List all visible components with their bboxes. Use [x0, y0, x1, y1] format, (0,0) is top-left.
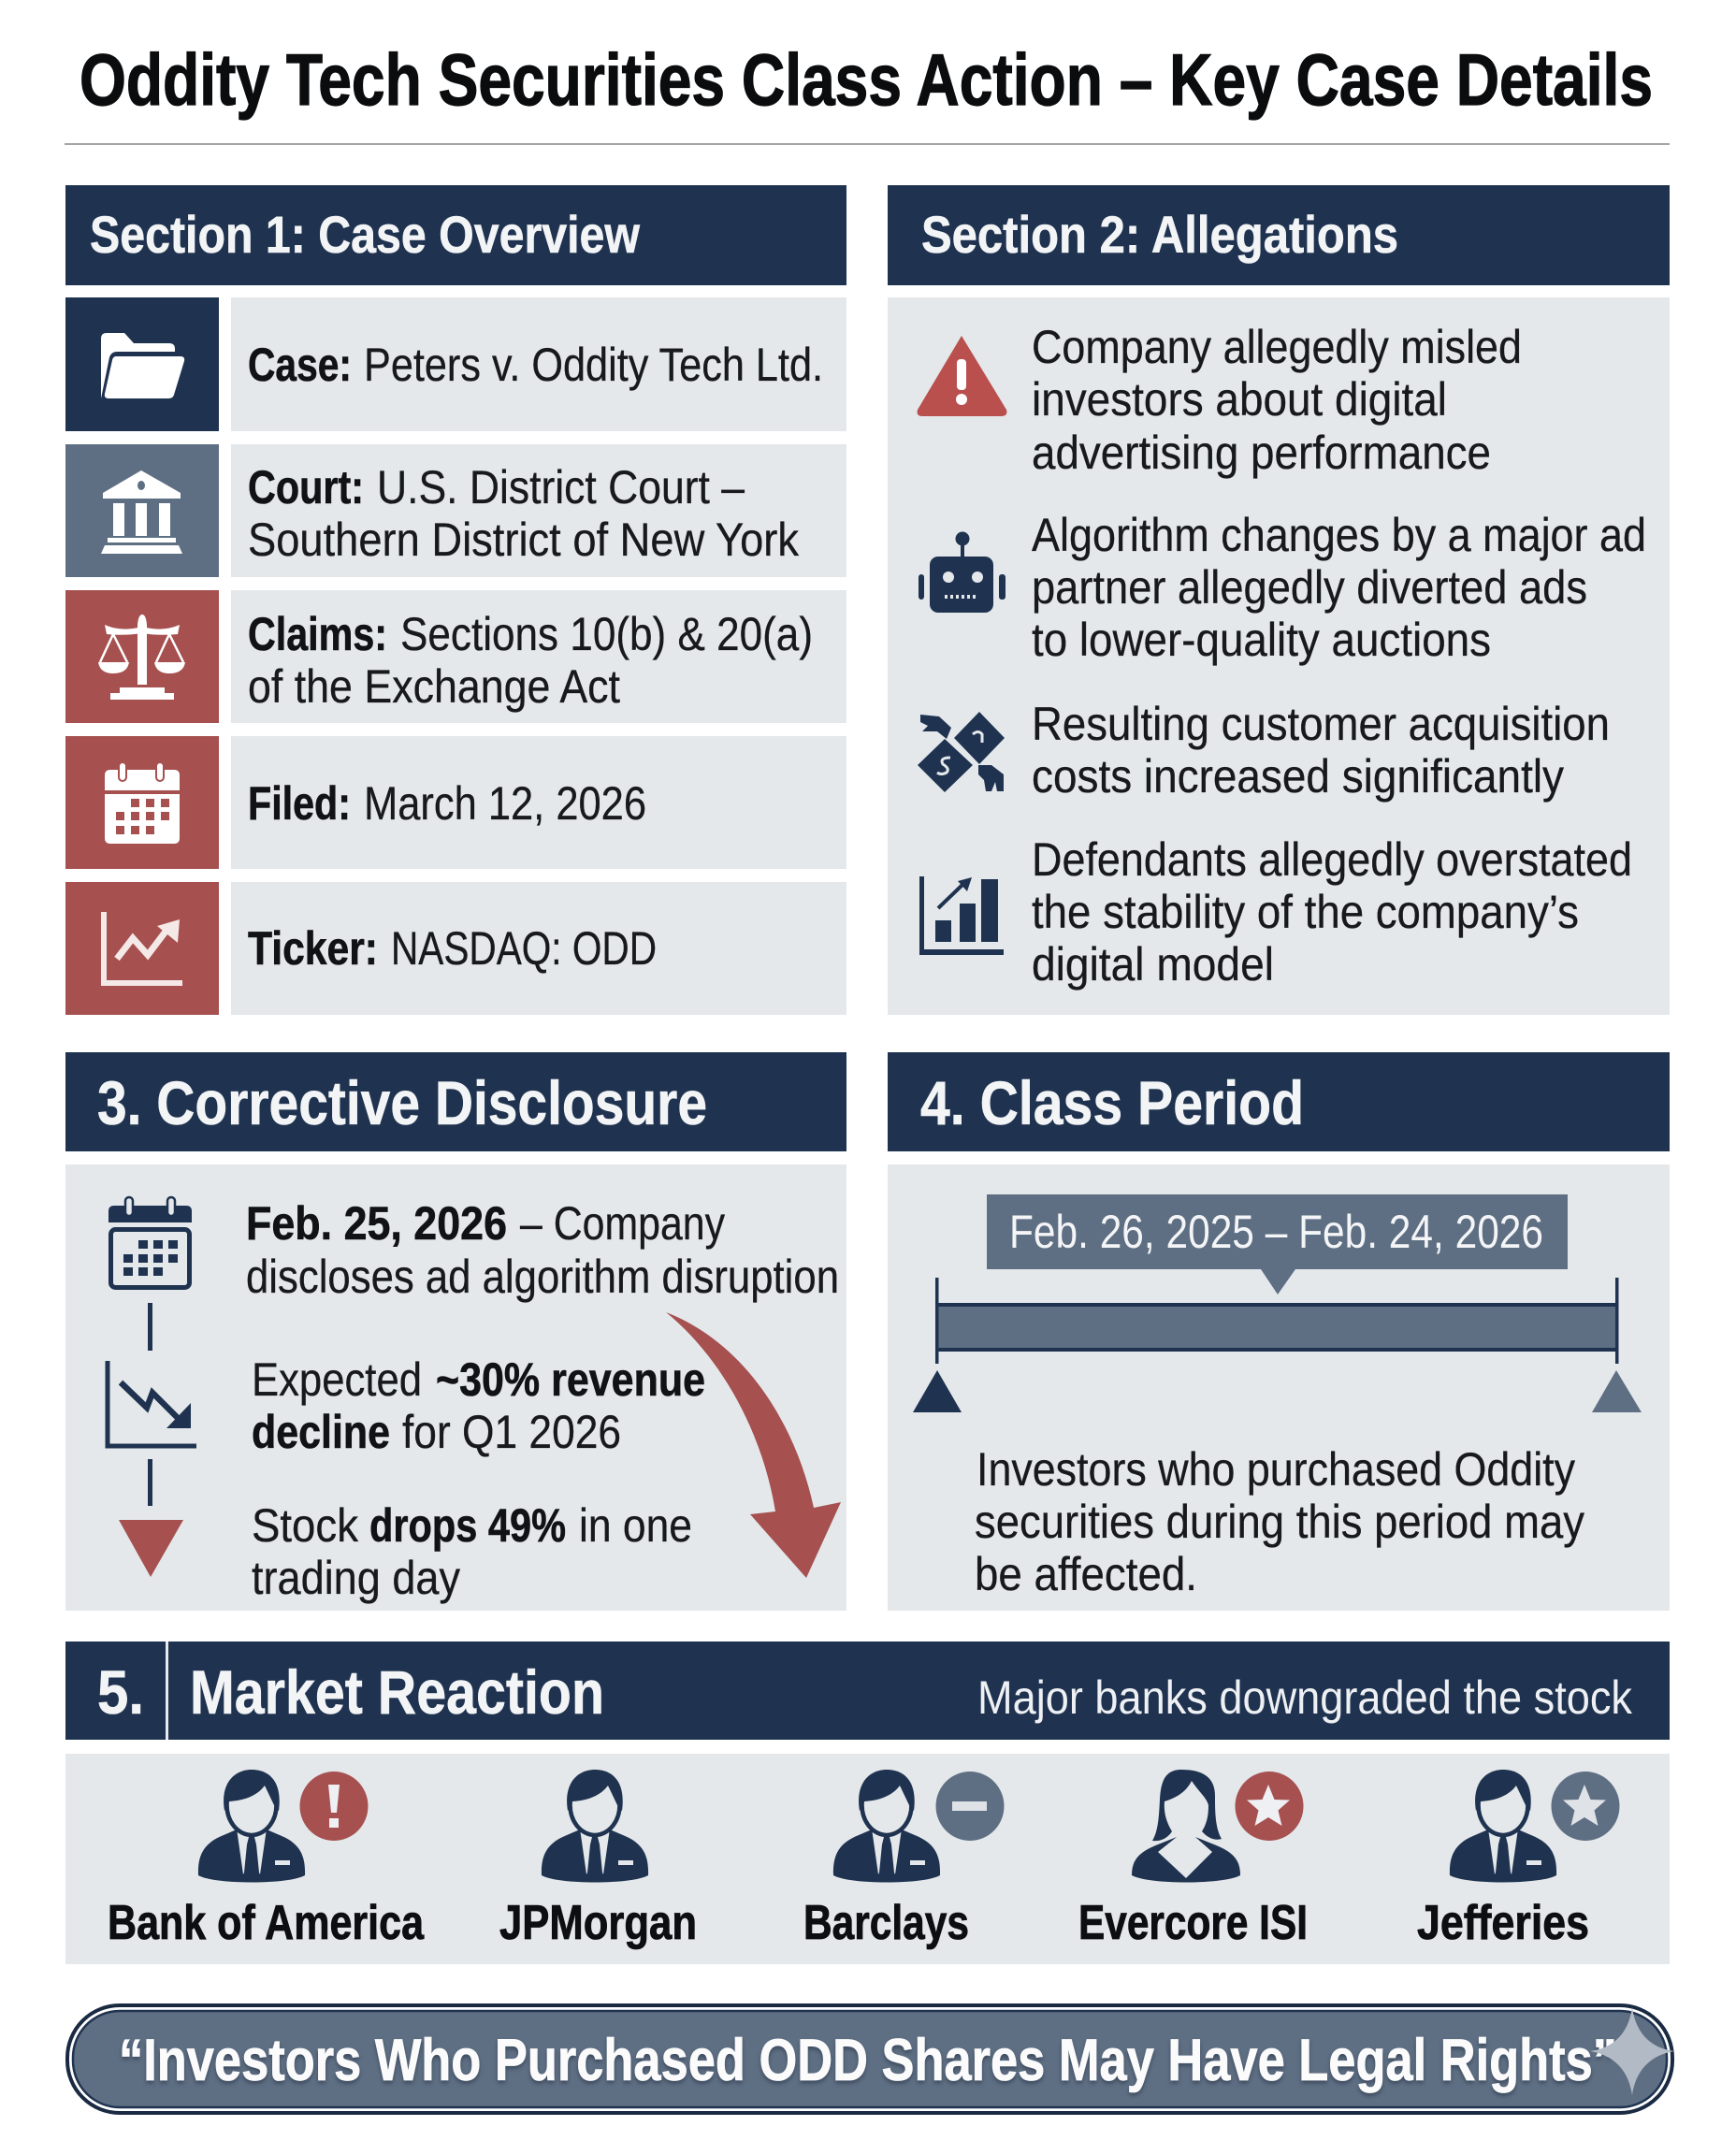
text: ticker: NASDAQ: ODD [391, 922, 657, 975]
text: allegation 4: digital model [1032, 938, 1274, 991]
panel: class period [888, 1052, 1670, 1611]
heading: section 1: Section 1: Case Overview [90, 205, 640, 264]
icon: robot [919, 531, 1005, 613]
icon: rising chart [104, 912, 182, 983]
icon: sparkle [1590, 2007, 1674, 2095]
text: allegation 1 [1032, 321, 1522, 479]
bank: Bank of America [108, 1770, 425, 1950]
text: allegation 3: costs increased significantly [1032, 750, 1564, 803]
text: court [248, 461, 800, 566]
bank: Barclays: Barclays [803, 1896, 969, 1950]
panel: corrective disclosure [65, 1052, 846, 1611]
text: court: Southern District of New York [248, 513, 800, 566]
text: allegation 1: Company allegedly misled [1032, 321, 1522, 373]
heading: section 4: 4. Class Period [920, 1068, 1304, 1137]
text: stock drop: drops 49% [369, 1499, 566, 1552]
icon: red down triangle [119, 1520, 183, 1577]
icon: scales of justice [98, 615, 185, 700]
text: stock drop: trading day [252, 1552, 460, 1604]
chart: timeline bar [913, 1278, 1642, 1412]
heading: section 5: Market Reaction [190, 1657, 604, 1727]
text: disclosure date: – Company [520, 1197, 725, 1250]
text: filed [248, 777, 646, 830]
icon: bar chart [919, 876, 1004, 955]
heading: section 2: Section 2: Allegations [921, 205, 1398, 264]
text: claims [248, 608, 813, 713]
panel: section 1 case overview [65, 185, 846, 1015]
text: disclosure date: Feb. 25, 2026 [246, 1197, 507, 1250]
text: allegation 2: to lower-quality auctions [1032, 614, 1491, 666]
icon: declining chart [108, 1361, 196, 1446]
bank: Jefferies: Jefferies [1417, 1896, 1589, 1950]
text: case: Case: [248, 339, 352, 391]
row: ticker [65, 882, 846, 1015]
text: ticker [248, 922, 657, 975]
text: ticker: Ticker: [248, 922, 378, 975]
row: claims [65, 590, 846, 723]
text: revenue decline: decline [252, 1406, 390, 1458]
heading: section 5: 5. [97, 1657, 144, 1727]
text: class period note [975, 1443, 1584, 1600]
row: filed [65, 736, 846, 869]
text: court: Court: [248, 461, 364, 513]
panel: market reaction [65, 1642, 1670, 1964]
text: court: U.S. District Court – [377, 461, 745, 513]
icon: warning triangle [918, 336, 1006, 416]
text: allegation 3 [1032, 698, 1610, 803]
text: class period note: Investors who purchased Oddity [976, 1443, 1575, 1496]
icon: calendar outline [108, 1197, 192, 1287]
heading: section 3 [65, 1052, 846, 1151]
text: allegation 2: Algorithm changes by a major ad [1032, 509, 1646, 561]
text: stock drop [252, 1499, 692, 1604]
arrow: large red curved arrow [666, 1312, 841, 1578]
callout banner: investors may have legal rights [67, 2005, 1674, 2113]
text: revenue decline: ~30% revenue [436, 1353, 705, 1406]
text: case: Peters v. Oddity Tech Ltd. [364, 339, 823, 391]
callout: date range [987, 1194, 1568, 1294]
text: allegation 1: investors about digital [1032, 373, 1447, 426]
icon: calendar [105, 762, 180, 844]
row: court [65, 444, 846, 577]
text: allegation 3: Resulting customer acquisition [1032, 698, 1610, 750]
bank: JPMorgan [499, 1770, 697, 1950]
text: disclosure date: discloses ad algorithm disruption [246, 1251, 839, 1303]
heading: section 1 [65, 185, 846, 285]
text: revenue decline: Expected [252, 1353, 422, 1406]
bank: JPMorgan: JPMorgan [499, 1896, 697, 1950]
heading: section 4 [888, 1052, 1670, 1151]
callout: date range: Feb. 26, 2025 – Feb. 24, 2026 [1009, 1206, 1543, 1258]
heading: section 2 [888, 185, 1670, 285]
text: allegation 4 [1032, 833, 1632, 991]
text: claims: Sections 10(b) & 20(a) [400, 608, 813, 660]
text: revenue decline: for Q1 2026 [402, 1406, 621, 1458]
icon: money and hands [918, 712, 1005, 792]
text: stock drop: Stock [252, 1499, 359, 1552]
bank: Bank of America: Bank of America [108, 1896, 425, 1950]
bank: Evercore ISI: Evercore ISI [1078, 1896, 1308, 1950]
row: case [65, 297, 846, 431]
text: disclosure date [246, 1197, 839, 1303]
text: revenue decline [252, 1353, 705, 1458]
text: allegation 1: advertising performance [1032, 427, 1491, 479]
text: filed: March 12, 2026 [364, 777, 646, 830]
bank: Evercore ISI [1078, 1770, 1308, 1950]
text: allegation 2: partner allegedly diverted ads [1032, 561, 1587, 614]
icon: courthouse [101, 470, 182, 554]
text: filed: Filed: [248, 777, 351, 830]
heading: section 3: 3. Corrective Disclosure [97, 1068, 707, 1137]
text: claims: of the Exchange Act [248, 660, 620, 713]
icon: folder [101, 333, 184, 398]
bank: Jefferies [1417, 1770, 1620, 1950]
bank: Barclays [803, 1770, 1005, 1950]
text: allegation 2 [1032, 509, 1646, 666]
panel: section 2 allegations [888, 185, 1670, 1015]
text: allegation 4: Defendants allegedly overstated [1032, 833, 1632, 886]
heading: section 5: Major banks downgraded the stock [977, 1671, 1633, 1724]
text: stock drop: in one [579, 1499, 692, 1552]
text: class period note: be affected. [975, 1548, 1197, 1600]
text: claims: Claims: [248, 608, 387, 660]
heading: section 5 [65, 1642, 1670, 1740]
text: allegation 4: the stability of the company’s [1032, 886, 1579, 938]
text: class period note: securities during this period may [975, 1496, 1584, 1548]
